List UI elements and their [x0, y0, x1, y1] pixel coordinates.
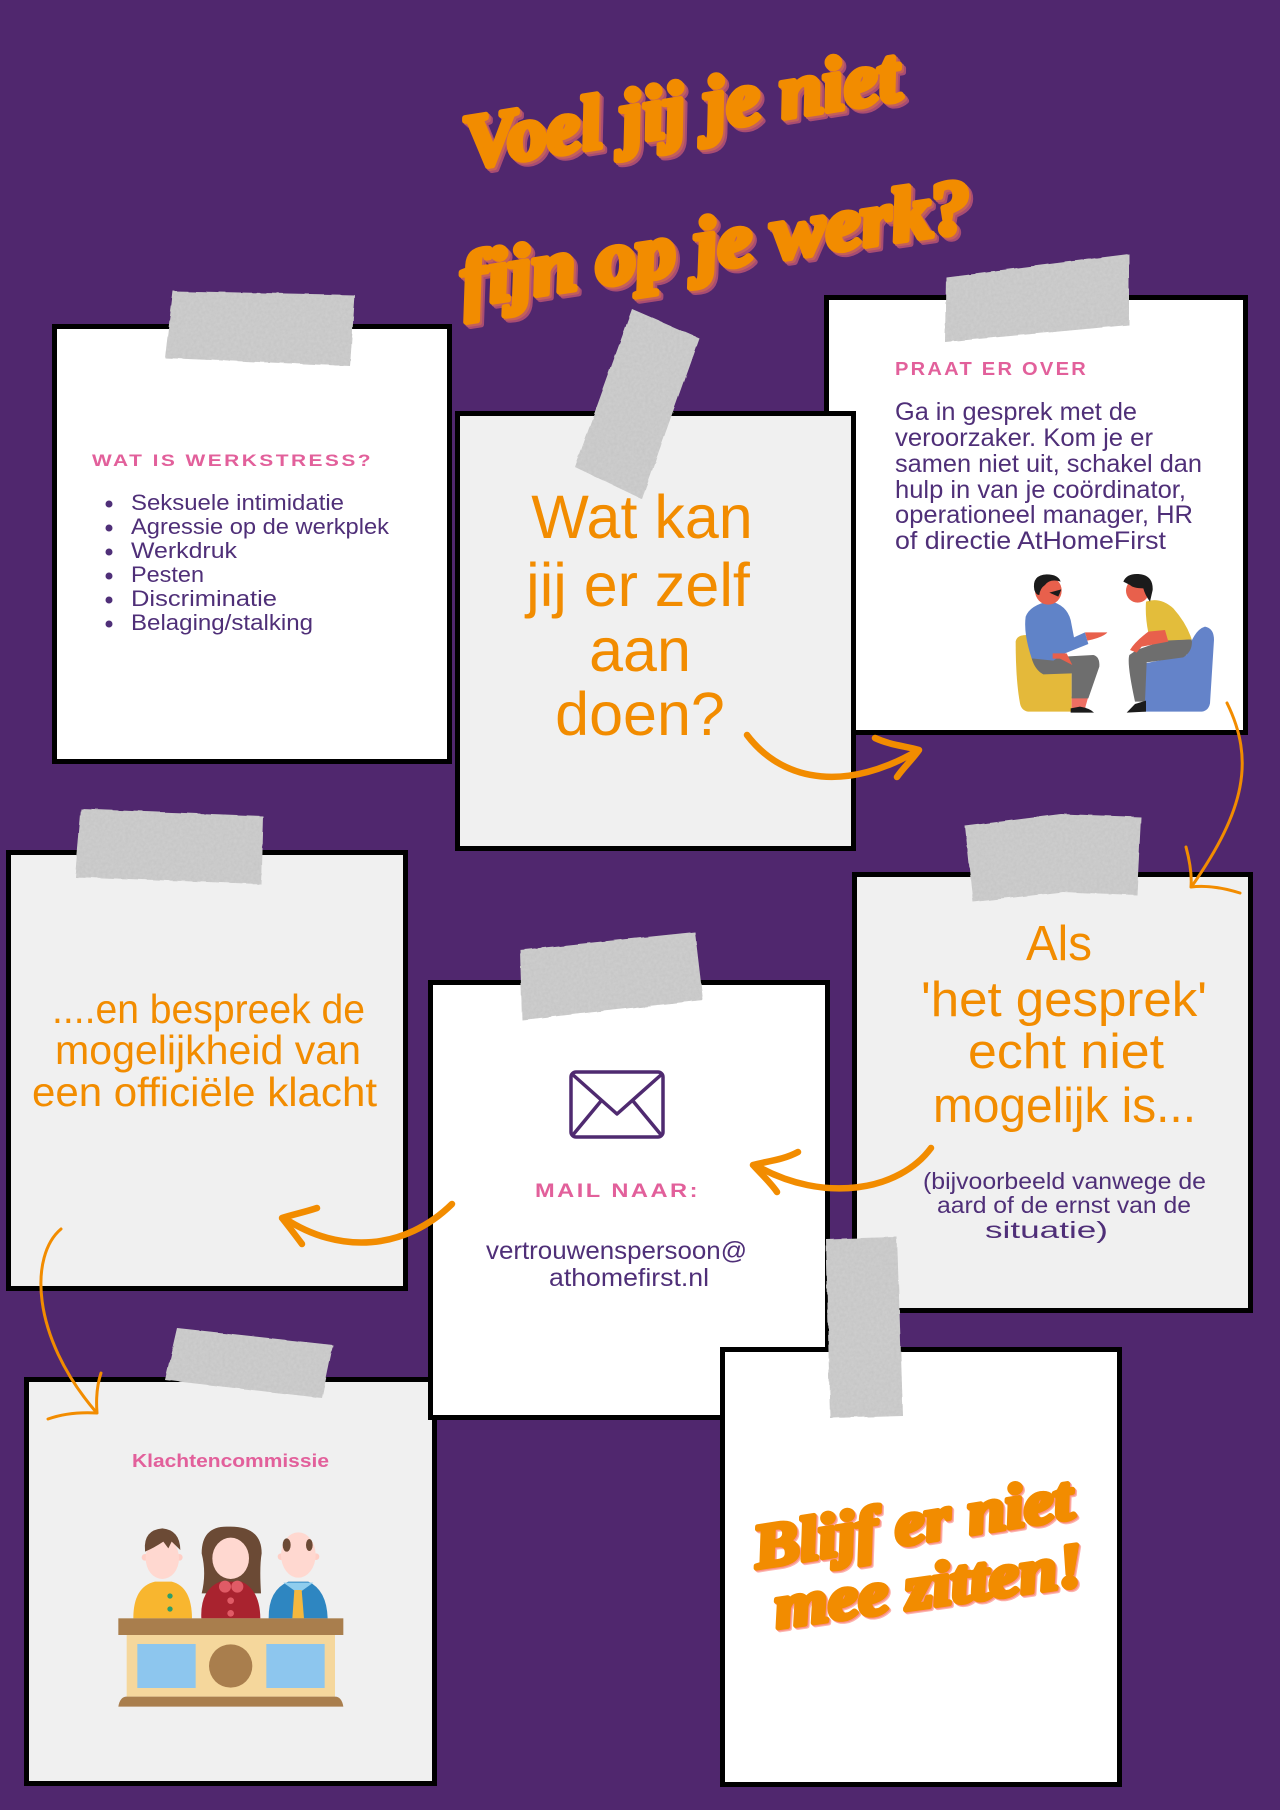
heading: als het gesprek: 'het gesprek' — [921, 973, 1207, 1027]
tape: klachtencommissie panel — [165, 1328, 333, 1398]
list: vormen van werkstress: Pesten — [131, 562, 204, 587]
heading: als het gesprek: echt niet — [968, 1025, 1164, 1079]
heading: mail naar: MAIL NAAR: — [535, 1181, 700, 1202]
heading: klachtencommissie: Klachtencommissie — [132, 1451, 329, 1471]
text: ga in gesprek: Ga in gesprek met de — [895, 398, 1137, 426]
title: fijn op je werk? — [454, 163, 977, 323]
text: bijvoorbeeld vanwege de aard — [923, 1168, 1206, 1243]
tape: werkstress panel — [165, 291, 355, 366]
heading: als het gesprek: mogelijk is... — [933, 1079, 1196, 1133]
icon: two people talking in chairs — [1016, 574, 1214, 713]
list: vormen van werkstress: Agressie op de werkplek — [131, 514, 390, 539]
heading: wat is werkstress: WAT IS WERKSTRESS? — [92, 451, 373, 470]
panel: en bespreek de mogelijkheid — [8, 852, 406, 1288]
title: Voel jij je niet — [458, 33, 908, 185]
panel: mail naar — [430, 982, 828, 1418]
text: blijf er niet mee zitten: Blijf er niet — [747, 1464, 1079, 1582]
panel: praat er over — [826, 298, 1246, 732]
list: vormen van werkstress: Discriminatie — [131, 586, 277, 611]
tape: blijf panel — [826, 1237, 903, 1418]
tape: bespreek panel — [75, 809, 263, 884]
text: en bespreek de mogelijkheid van een officiele klacht: mogelijkheid van — [55, 1027, 361, 1073]
panel: wat kan jij er zelf aan doen — [458, 414, 854, 848]
text: en bespreek de mogelijkheid van een officiele klacht: een officiële klacht — [32, 1069, 378, 1115]
heading: wat kan jij er zelf aan doen: jij er zelf — [524, 551, 751, 619]
heading: praat er over: PRAAT ER OVER — [895, 359, 1088, 379]
arrow: bespreek to klachtencommissie — [41, 1229, 101, 1419]
heading: wat kan jij er zelf aan doen: Wat kan — [531, 483, 753, 551]
text: en bespreek de mogelijkheid van een officiele klacht: ....en bespreek de — [52, 986, 365, 1032]
heading: wat kan jij er zelf aan doen: aan — [589, 616, 691, 684]
text: ga in gesprek: samen niet uit, schakel dan — [895, 450, 1202, 478]
list: vormen van werkstress: Belaging/stalking — [131, 610, 313, 635]
text: e-mailadres: athomefirst.nl — [549, 1264, 709, 1292]
text: e-mailadres: vertrouwenspersoon@ — [486, 1237, 747, 1265]
icon: committee behind desk — [118, 1527, 343, 1707]
text: ga in gesprek — [895, 398, 1202, 555]
heading: als het gesprek — [921, 917, 1207, 1133]
list: vormen van werkstress: Seksuele intimidatie — [131, 490, 344, 515]
text: ga in gesprek: veroorzaker. Kom je er — [895, 424, 1153, 452]
heading: wat kan jij er zelf aan doen: doen? — [555, 680, 725, 748]
text: bijvoorbeeld vanwege de aard: situatie) — [985, 1217, 1108, 1243]
text: blijf er niet mee zitten: mee zitten! — [769, 1531, 1088, 1642]
icon: envelope — [571, 1072, 663, 1137]
tape: als het gesprek panel — [965, 814, 1141, 902]
heading: wat kan jij er zelf aan doen — [524, 483, 753, 748]
arrow: praat er over to als — [1186, 703, 1242, 893]
list: vormen van werkstress — [106, 490, 390, 635]
tape: praat er over panel — [945, 254, 1129, 342]
text: bijvoorbeeld vanwege de aard: aard of de ernst van de — [937, 1192, 1191, 1218]
text: ga in gesprek: of directie AtHomeFirst — [895, 527, 1166, 555]
panel: wat is werkstress — [54, 326, 450, 762]
heading: als het gesprek: Als — [1026, 917, 1092, 971]
tape: mail panel — [520, 932, 703, 1020]
text: bijvoorbeeld vanwege de aard: (bijvoorbeeld vanwege de — [923, 1168, 1206, 1194]
title — [454, 33, 977, 323]
panel: blijf er niet mee zitten — [722, 1350, 1120, 1784]
arrow: als to mail — [753, 1148, 931, 1192]
text: ga in gesprek: hulp in van je coördinator, — [895, 476, 1186, 504]
tape: wat kan panel — [575, 309, 699, 499]
text: en bespreek de mogelijkheid van een officiele klacht — [32, 986, 378, 1115]
panel: klachtencommissie — [26, 1380, 434, 1784]
text: e-mailadres — [486, 1237, 747, 1292]
panel: als het gesprek niet mogelijk is — [854, 874, 1250, 1310]
arrow: wat kan to praat er over — [747, 735, 919, 777]
text: ga in gesprek: operationeel manager, HR — [895, 501, 1193, 529]
arrow: mail to bespreek — [282, 1204, 452, 1244]
list: vormen van werkstress: Werkdruk — [131, 538, 238, 563]
text: blijf er niet mee zitten — [747, 1464, 1088, 1642]
